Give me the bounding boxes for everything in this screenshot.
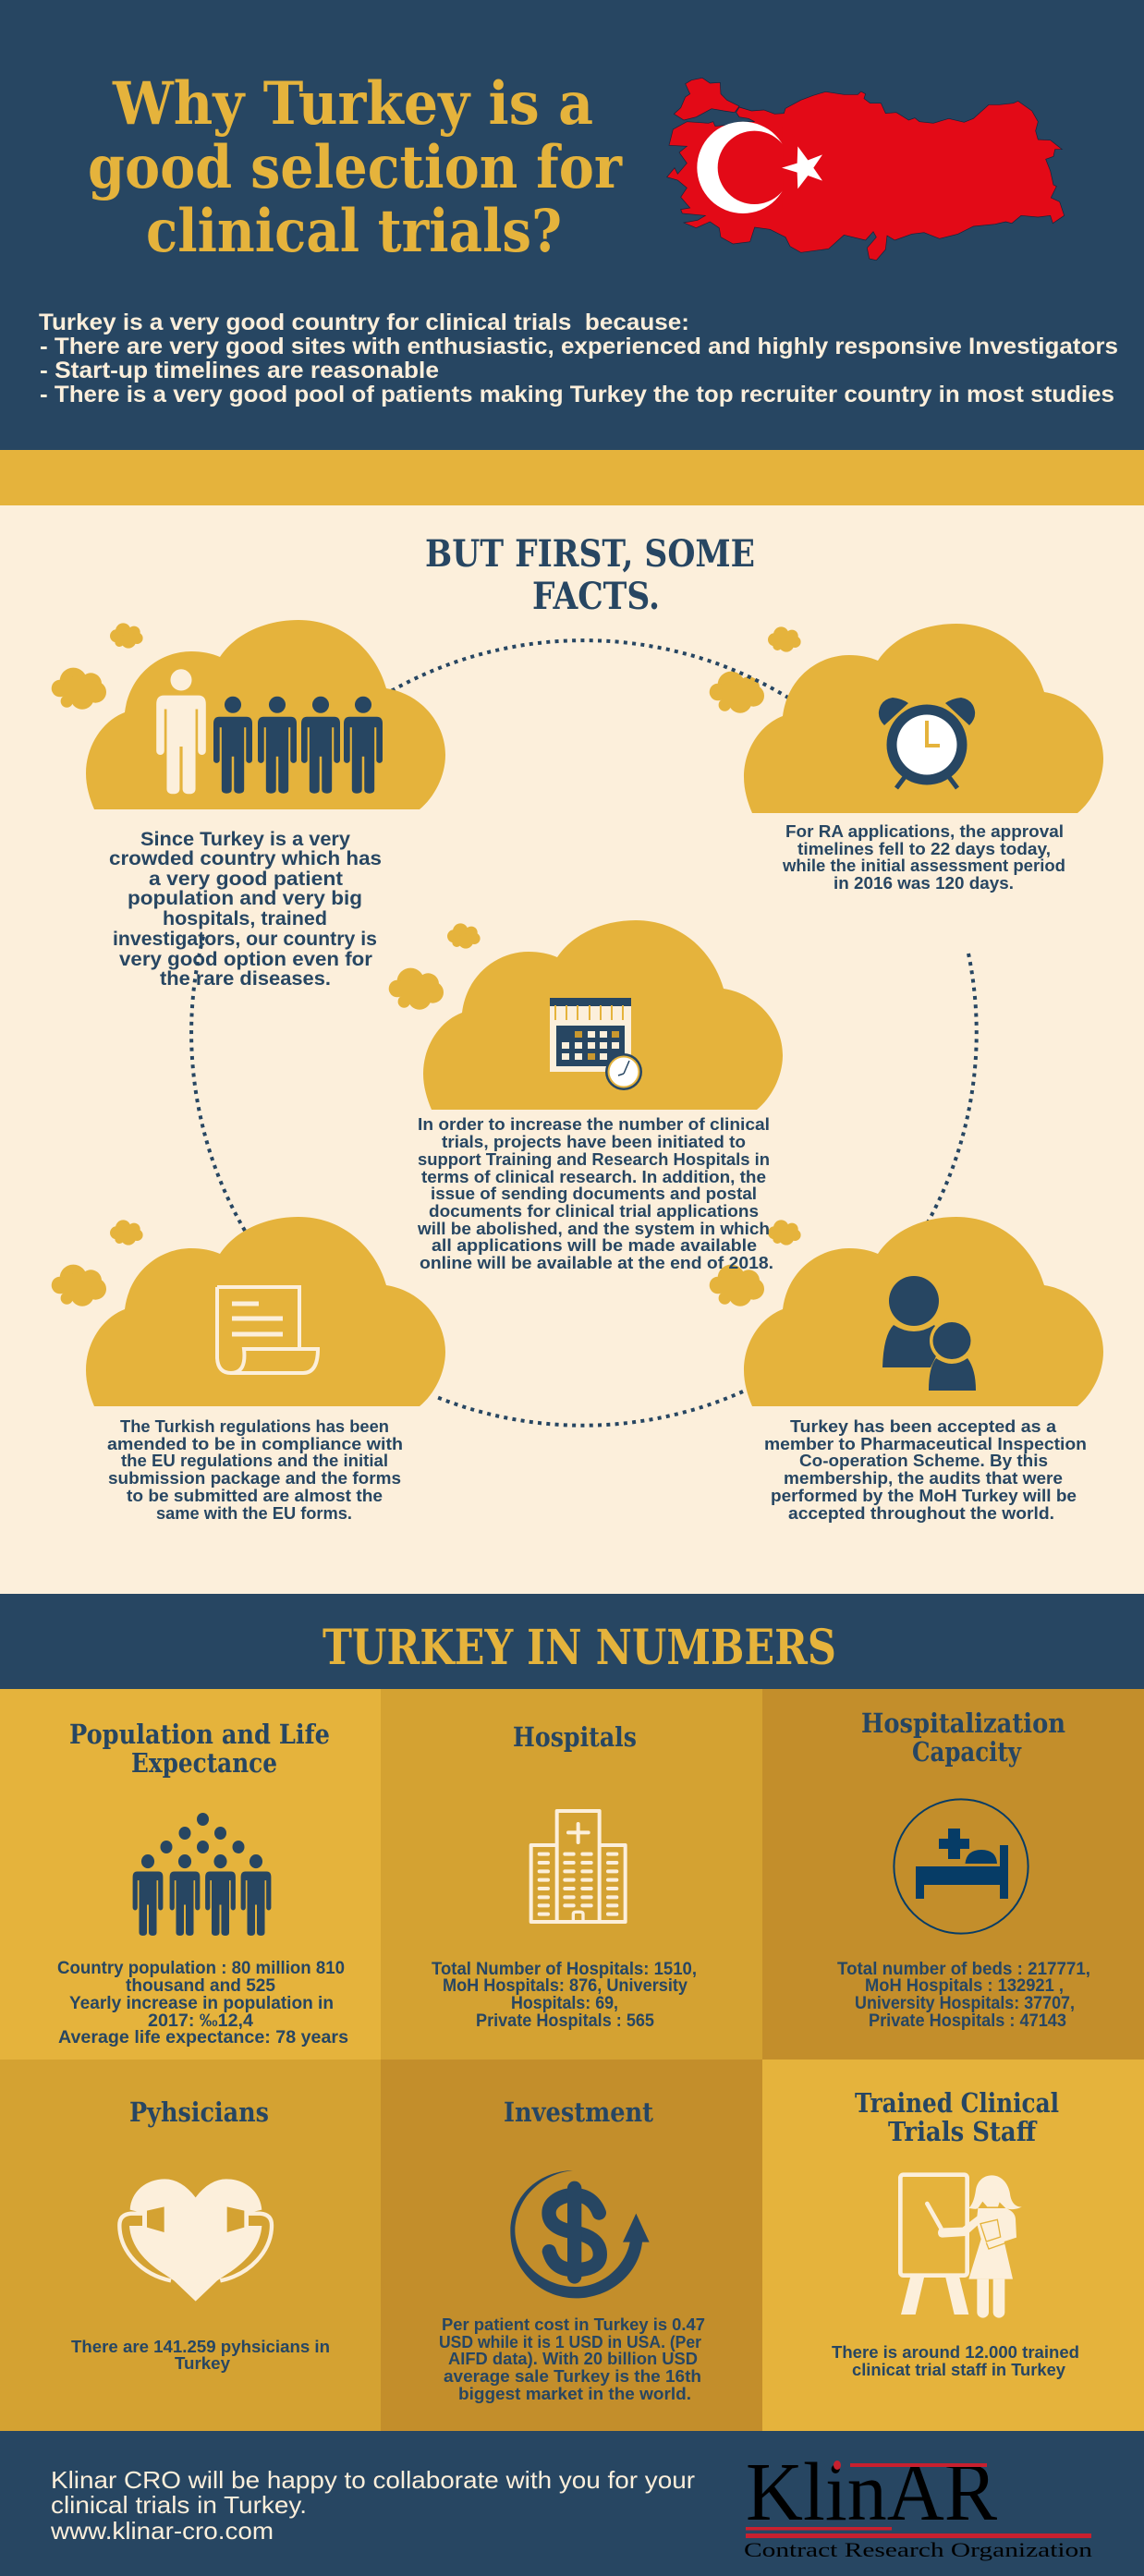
text: patient population: crowded country which has xyxy=(109,848,382,869)
text: MoH Hospitals: 876, University xyxy=(443,1976,688,1996)
numbers heading: TURKEY IN NUMBERS xyxy=(323,1620,836,1676)
text: approval timelines: timelines fell to 22 days today, xyxy=(797,840,1051,858)
title: Why Turkey is a xyxy=(112,69,593,139)
text: Private Hospitals : 565 xyxy=(476,2011,654,2031)
panel: physicians xyxy=(0,2060,381,2431)
text: patient population: population and very big xyxy=(128,888,362,909)
panel: EU regulations xyxy=(86,1217,445,1523)
text xyxy=(432,1960,697,2031)
icon: crowd xyxy=(133,1813,271,1936)
heading: Population and Life xyxy=(69,1719,330,1750)
icon: Turkey map with flag xyxy=(667,78,1065,261)
panel: population and life expectance xyxy=(0,1689,381,2060)
text: patient population: a very good patient xyxy=(149,869,343,890)
text: research projects: In order to increase the number of clinical xyxy=(418,1115,770,1134)
text: research projects: trials, projects have been initiated to xyxy=(442,1133,746,1151)
numbers heading band xyxy=(0,1594,1144,1689)
heading xyxy=(69,1719,330,1779)
text: PIC/S membership: membership, the audits that were xyxy=(784,1469,1063,1488)
icon: people group xyxy=(156,669,383,794)
footer panel xyxy=(0,2431,1144,2576)
icon: two people xyxy=(882,1276,976,1391)
text: research projects: issue of sending documents and postal xyxy=(431,1185,757,1203)
intro text: - There are very good sites with enthusiastic, experienced and highly responsive Investigators xyxy=(40,334,1118,359)
text: thousand and 525 xyxy=(126,1976,275,1996)
text: EU regulations xyxy=(107,1417,403,1523)
text: average sale Turkey is the 16th xyxy=(444,2367,701,2386)
text: approval timelines xyxy=(782,822,1065,893)
text: Average life expectance: 78 years xyxy=(58,2028,348,2047)
text: University Hospitals: 37707, xyxy=(855,1994,1075,2013)
icon: calendar with clock xyxy=(550,998,642,1090)
text: clinicat trial staff in Turkey xyxy=(852,2361,1065,2379)
small cloud puffs xyxy=(52,623,801,1306)
panel: research projects xyxy=(417,920,783,1272)
text: EU regulations: same with the EU forms. xyxy=(156,1504,352,1523)
text: research projects: support Training and Research Hospitals in xyxy=(418,1150,770,1169)
text: PIC/S membership: Turkey has been accepted as a xyxy=(790,1417,1057,1436)
text: EU regulations: submission package and the forms xyxy=(108,1469,401,1488)
text xyxy=(57,1959,348,2047)
text: Hospitals: 69, xyxy=(511,1994,618,2013)
icon: teacher at board xyxy=(900,2175,1022,2318)
panel: trained staff xyxy=(762,2060,1144,2431)
text: There is around 12.000 trained xyxy=(832,2343,1079,2362)
text xyxy=(832,2343,1079,2379)
text xyxy=(71,2338,330,2373)
text xyxy=(837,1960,1090,2031)
footer text xyxy=(50,2466,695,2545)
text: biggest market in the world. xyxy=(458,2385,691,2403)
text: There are 141.259 pyhsicians in xyxy=(71,2338,330,2356)
intro text: Turkey is a very good country for clinical trials because: xyxy=(39,310,689,335)
text: Country population : 80 million 810 xyxy=(57,1959,345,1978)
heading xyxy=(855,2087,1059,2147)
logo: KlinAR: KlinAR xyxy=(746,2447,997,2538)
heading: Hospitalization xyxy=(861,1707,1065,1739)
text: patient population: the rare diseases. xyxy=(160,968,331,990)
intro text: - There is a very good pool of patients making Turkey the top recruiter country in most studies xyxy=(40,382,1114,407)
logo: KlinAR xyxy=(744,2447,1092,2561)
text: Turkey xyxy=(175,2354,230,2373)
heading: Investment xyxy=(504,2096,654,2128)
heading: Capacity xyxy=(912,1736,1022,1768)
cloud xyxy=(86,1217,445,1406)
panel: hospitalization capacity xyxy=(762,1689,1144,2060)
text: PIC/S membership: accepted throughout the world. xyxy=(788,1504,1054,1523)
text: research projects: documents for clinical trial applications xyxy=(429,1202,759,1221)
footer text: Klinar CRO will be happy to collaborate with you for your xyxy=(51,2466,695,2494)
text: Private Hospitals : 47143 xyxy=(869,2011,1066,2031)
logo: KlinAR: Contract Research Organization xyxy=(744,2538,1092,2561)
icon: hospital bed xyxy=(894,1799,1028,1934)
text: Total Number of Hospitals: 1510, xyxy=(432,1960,697,1979)
text: Yearly increase in population in xyxy=(69,1994,334,2013)
cloud xyxy=(86,620,445,809)
cloud xyxy=(423,920,783,1110)
panel: PIC/S membership xyxy=(744,1217,1103,1523)
text: 2017: ‰12,4 xyxy=(148,2011,253,2031)
panel: investment xyxy=(381,2060,762,2431)
text: patient population: investigators, our country is xyxy=(113,929,377,950)
text xyxy=(439,2315,705,2403)
text: Per patient cost in Turkey is 0.47 xyxy=(442,2315,705,2334)
text: research projects: will be abolished, and the system in which xyxy=(417,1220,770,1238)
text: approval timelines: while the initial assessment period xyxy=(782,857,1065,875)
panel: approval timelines xyxy=(744,624,1103,893)
text: research projects: terms of clinical research. In addition, the xyxy=(421,1168,766,1186)
facts heading xyxy=(425,532,755,618)
intro text: - Start-up timelines are reasonable xyxy=(40,358,439,383)
text: PIC/S membership xyxy=(764,1417,1087,1523)
heading: Expectance xyxy=(131,1747,277,1779)
title xyxy=(88,69,623,266)
text: EU regulations: amended to be in compliance with xyxy=(107,1435,403,1453)
heading: Pyhsicians xyxy=(129,2096,269,2128)
header panel xyxy=(0,0,1144,450)
text: PIC/S membership: member to Pharmaceutical Inspection xyxy=(764,1435,1087,1453)
cloud xyxy=(744,1217,1103,1406)
dotted ring connector xyxy=(191,640,977,1426)
icon: alarm clock xyxy=(879,698,975,788)
text: Total number of beds : 217771, xyxy=(837,1960,1090,1979)
icon: hospital building xyxy=(531,1811,626,1922)
text: research projects: all applications will be made available xyxy=(432,1236,757,1255)
text: research projects: online will be available at the end of 2018. xyxy=(420,1254,773,1272)
icon: dollar with arrow xyxy=(510,2170,650,2298)
gold band xyxy=(0,450,1144,505)
footer text: clinical trials in Turkey. xyxy=(51,2491,307,2519)
cloud xyxy=(744,624,1103,813)
text: EU regulations: to be submitted are almost the xyxy=(127,1487,383,1505)
panel: patient population xyxy=(86,620,445,990)
text: patient population: Since Turkey is a very xyxy=(140,829,350,850)
text: PIC/S membership: Co-operation Scheme. By this xyxy=(799,1452,1048,1470)
facts panel xyxy=(0,505,1144,1594)
facts heading: FACTS. xyxy=(532,575,660,618)
facts heading: BUT FIRST, SOME xyxy=(425,532,755,576)
text: research projects xyxy=(417,1115,773,1272)
text: EU regulations: The Turkish regulations has been xyxy=(120,1417,389,1436)
intro text xyxy=(39,310,1118,407)
icon: heart with stethoscope xyxy=(119,2179,272,2302)
footer text: www.klinar-cro.com xyxy=(50,2517,274,2545)
text: approval timelines: in 2016 was 120 days. xyxy=(834,874,1014,893)
panel: hospitals xyxy=(381,1689,762,2060)
title: good selection for xyxy=(88,133,623,202)
heading: Hospitals xyxy=(513,1721,637,1753)
text: AIFD data). With 20 billion USD xyxy=(448,2350,698,2368)
icon: document scroll xyxy=(217,1287,318,1373)
text: patient population xyxy=(109,829,382,990)
text: approval timelines: For RA applications, the approval xyxy=(785,822,1064,841)
heading: Trained Clinical xyxy=(855,2087,1059,2119)
text: MoH Hospitals : 132921 , xyxy=(865,1976,1064,1996)
text: USD while it is 1 USD in USA. (Per xyxy=(439,2333,701,2351)
heading: Trials Staff xyxy=(888,2116,1038,2147)
text: PIC/S membership: performed by the MoH Turkey will be xyxy=(771,1487,1077,1505)
title: clinical trials? xyxy=(146,197,562,266)
text: patient population: very good option even for xyxy=(119,949,372,970)
text: EU regulations: the EU regulations and the initial xyxy=(121,1452,388,1470)
text: patient population: hospitals, trained xyxy=(163,908,327,930)
heading xyxy=(861,1707,1065,1768)
